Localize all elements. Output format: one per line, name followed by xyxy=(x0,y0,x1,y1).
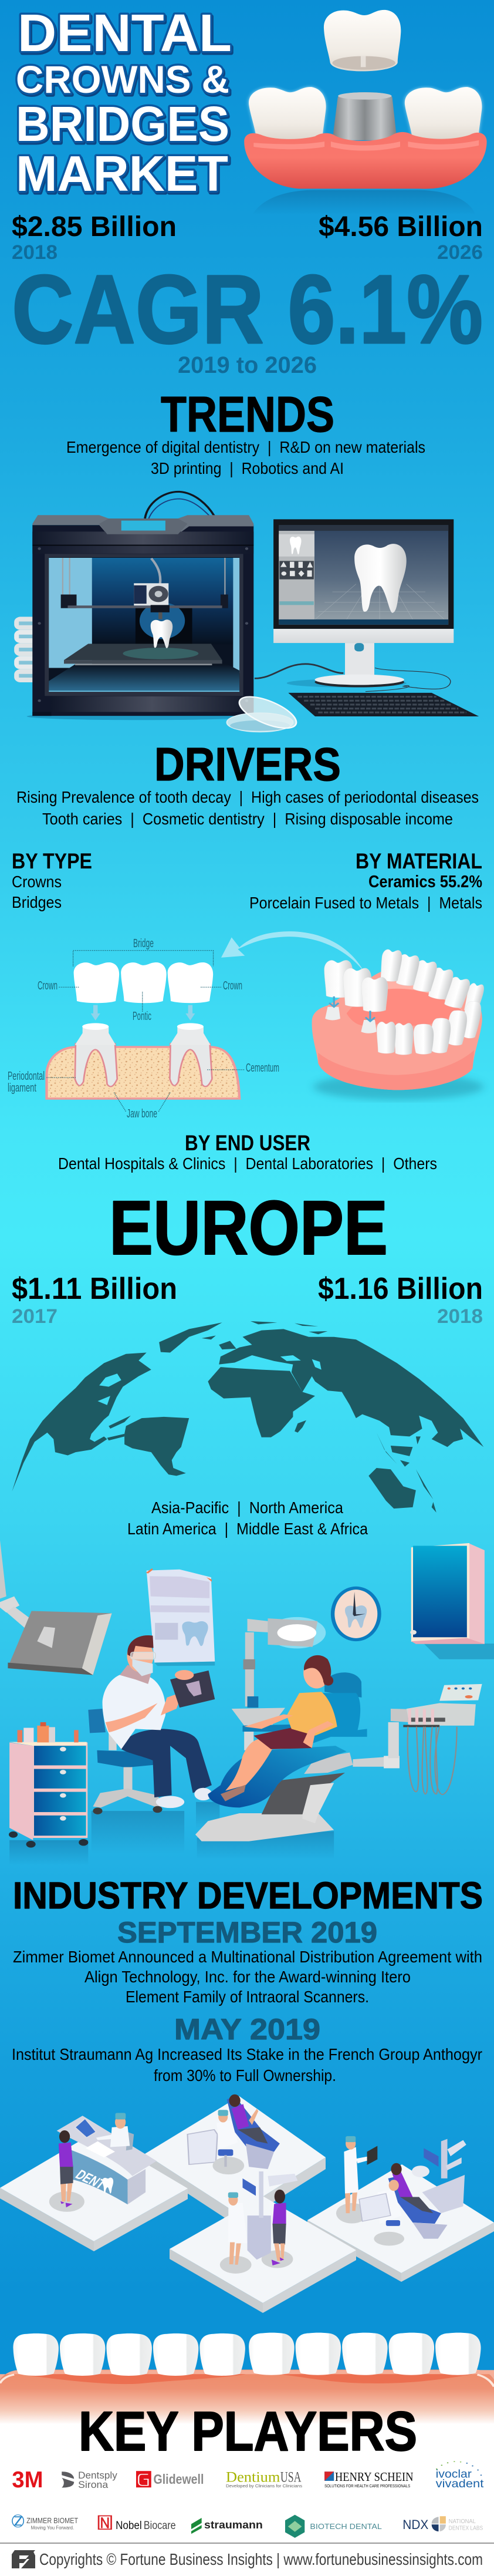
printed tooth xyxy=(151,619,172,648)
greenland xyxy=(159,1322,222,1353)
world map xyxy=(12,1321,483,1513)
x-ray viewer panel xyxy=(8,1611,112,1675)
gum xyxy=(244,132,487,189)
instrument unit xyxy=(388,1684,482,1794)
anatomy labels: Jaw bone xyxy=(127,1107,157,1120)
development text: zimmer biomet xyxy=(13,1948,482,2006)
segment: by material xyxy=(249,849,482,912)
logo: Nobel Biocare: Nobel xyxy=(116,2519,142,2532)
trends text: Emergence of digital dentistry | R&D on new materials xyxy=(66,438,425,456)
company logos: USA xyxy=(280,2469,302,2486)
drivers text xyxy=(16,788,479,828)
dental unit right xyxy=(359,2139,466,2246)
logo: Zimmer Biomet: Moving You Forward. xyxy=(31,2526,74,2531)
anatomy labels: Bridge xyxy=(133,937,154,950)
drawer cart xyxy=(9,1722,88,1847)
title: BRIDGES xyxy=(16,96,229,151)
resin disc stack xyxy=(14,617,58,682)
gum band xyxy=(0,2369,494,2424)
computer monitor xyxy=(273,519,454,688)
overhead arm xyxy=(0,1540,44,1638)
lamp and sink xyxy=(232,1617,326,1750)
segment: by type: Crowns xyxy=(12,873,62,891)
stat: 2026 market size: 2026 xyxy=(437,241,483,264)
small arrows xyxy=(329,996,375,1021)
floor reflections xyxy=(9,1802,334,1865)
logo: Dentsply Sirona: Dentsply xyxy=(78,2469,117,2481)
logo: Dentsply Sirona xyxy=(62,2469,117,2490)
printer body xyxy=(27,515,257,720)
eurasia xyxy=(219,1329,483,1447)
anatomy labels: Crown xyxy=(223,979,242,992)
heading: key players: KEY PLAYERS xyxy=(79,2400,417,2463)
logo: Henry Schein: SOLUTIONS FOR HEALTH CARE PROFESSIONALS xyxy=(324,2484,410,2489)
keyboard xyxy=(288,693,479,716)
logo: Ivoclar Vivadent: ivoclar xyxy=(436,2468,472,2480)
date: may 2019: MAY 2019 xyxy=(174,2013,320,2046)
stat: 2026 market size: $4.56 Billion xyxy=(319,211,483,243)
CAGR period: 2019 to 2026 xyxy=(178,352,317,378)
patient chair xyxy=(208,1672,367,1807)
platform: top centre xyxy=(145,2096,326,2225)
isometric clinic platforms xyxy=(0,2096,494,2313)
southeast asia islands xyxy=(377,1433,437,1513)
doctor and assistant bottom xyxy=(220,2171,297,2274)
hero illustration: crown, abutment and gum xyxy=(244,10,487,215)
stat: europe 2018: $1.16 Billion xyxy=(318,1272,483,1306)
logo: Henry Schein xyxy=(324,2470,414,2489)
row of teeth xyxy=(13,2333,481,2376)
dental chair base xyxy=(195,1753,400,1841)
reception desk xyxy=(57,2116,157,2204)
logo: Henry Schein: HENRY SCHEIN xyxy=(335,2470,414,2484)
africa xyxy=(208,1367,315,1437)
computer cables xyxy=(255,664,451,692)
metal abutment xyxy=(333,92,397,140)
logo: Straumann xyxy=(191,2518,263,2534)
australia xyxy=(368,1468,416,1508)
isometric clinic figures xyxy=(49,2095,466,2274)
right abutment tooth xyxy=(170,1023,212,1086)
printer cables xyxy=(145,491,214,518)
logo: Ivoclar Vivadent xyxy=(436,2461,483,2490)
logo: Glidewell: Glidewell xyxy=(154,2472,204,2487)
company logos xyxy=(12,2461,483,2538)
stat: europe 2017: $1.11 Billion xyxy=(12,1272,177,1306)
other regions text xyxy=(127,1499,368,1538)
white footer panel xyxy=(0,2424,494,2576)
anatomy labels: Cementum xyxy=(246,1062,279,1075)
logo: Straumann: straumann xyxy=(204,2519,263,2531)
anatomy labels xyxy=(8,937,279,1120)
illustration: 3D printer and computer xyxy=(14,491,479,735)
illustration: denture with bridge xyxy=(221,931,485,1100)
heading: drivers: DRIVERS xyxy=(154,738,341,790)
laptop xyxy=(75,2119,96,2138)
segment: by type: BY TYPE xyxy=(12,849,92,873)
print bed xyxy=(64,644,222,665)
title: CROWNS & xyxy=(16,58,229,101)
development text: straumann xyxy=(12,2045,482,2085)
receptionist xyxy=(96,2113,134,2150)
footer divider xyxy=(0,2543,494,2544)
right tooth xyxy=(405,87,482,140)
stat: 2018 market size: $2.85 Billion xyxy=(12,211,177,243)
implant stubs xyxy=(325,1007,377,1033)
bridge teeth xyxy=(74,962,213,1003)
anatomy labels: Crown xyxy=(38,979,57,992)
trends text xyxy=(66,438,425,477)
back teeth xyxy=(379,949,485,1013)
leader lines xyxy=(46,951,245,1112)
platform: right xyxy=(307,2164,494,2282)
segment: by end user xyxy=(58,1131,437,1173)
bridge piece xyxy=(324,960,388,1012)
petri dish xyxy=(227,691,302,735)
caribbean xyxy=(107,1416,131,1440)
standing doctor with tablet xyxy=(336,2136,377,2224)
anatomy labels: Periodontal xyxy=(8,1070,45,1083)
anatomy labels: ligament xyxy=(8,1082,36,1095)
date: september 2019: SEPTEMBER 2019 xyxy=(117,1916,377,1949)
logo: National Dentex Labs xyxy=(402,2516,483,2532)
logo: National Dentex Labs: NDX xyxy=(402,2518,428,2532)
logo: Zimmer Biomet: ZIMMER BIOMET xyxy=(26,2517,78,2525)
logo: Glidewell xyxy=(136,2471,204,2487)
wall poster xyxy=(146,1568,215,1666)
other regions text: Latin America | Middle East & Africa xyxy=(127,1520,368,1538)
stat: 2026 market size xyxy=(319,211,483,264)
stat: 2018 market size xyxy=(12,211,177,264)
stat: europe 2018 xyxy=(318,1272,483,1328)
printer window xyxy=(45,554,243,696)
illustration: dental clinic scene xyxy=(0,1540,494,1865)
curved arrow xyxy=(221,931,364,971)
stat: 2018 market size: 2018 xyxy=(12,241,57,264)
gantry and print head xyxy=(61,558,228,619)
title: MARKET xyxy=(16,146,228,202)
wall clock xyxy=(331,1587,381,1641)
british isles and arctic islands xyxy=(202,1321,327,1349)
drivers text: Tooth caries | Cosmetic dentistry | Rising disposable income xyxy=(42,810,453,828)
jaw bone xyxy=(46,1047,239,1099)
gum reflection xyxy=(252,190,476,215)
visitor at desk xyxy=(49,2130,84,2212)
denture shadow xyxy=(313,1074,483,1100)
placement arrows xyxy=(91,1005,195,1021)
logo: Dentium USA: Dentium xyxy=(226,2469,280,2486)
logo: Biotech Dental: BIOTECH DENTAL xyxy=(310,2522,382,2531)
treatment unit top xyxy=(188,2095,280,2174)
x-ray film xyxy=(170,1670,215,1708)
logo: Nobel Biocare: Biocare xyxy=(144,2519,176,2532)
segment: by type: Bridges xyxy=(12,893,62,911)
dentist on stool xyxy=(88,1635,212,1814)
stat: europe 2018: 2018 xyxy=(437,1305,483,1328)
south america xyxy=(124,1417,189,1476)
footer brand icon xyxy=(12,2550,35,2568)
logo: National Dentex Labs: NATIONAL xyxy=(449,2518,476,2524)
glow behind teeth xyxy=(249,87,482,137)
development text: zimmer biomet: Element Family of Intraoral Scanners. xyxy=(126,1988,369,2006)
logo: Dentium USA: Developed by Clinicians for Clinicians xyxy=(226,2484,302,2489)
front teeth xyxy=(377,1001,483,1055)
title xyxy=(16,4,232,202)
title: DENTAL xyxy=(18,4,232,63)
logo: Biotech Dental xyxy=(285,2515,382,2538)
anatomy labels: Pontic xyxy=(133,1010,151,1023)
segment: by end user: Dental Hospitals & Clinics | Dental Laboratories | Others xyxy=(58,1154,437,1173)
logo: Dentsply Sirona: Sirona xyxy=(78,2479,109,2490)
floating crown xyxy=(324,10,401,71)
madagascar xyxy=(295,1420,306,1433)
platform: reception xyxy=(0,2133,188,2251)
logo: Nobel Biocare xyxy=(99,2516,176,2532)
left abutment tooth xyxy=(75,1023,117,1086)
logo: Zimmer Biomet xyxy=(12,2515,78,2531)
development text: zimmer biomet: Align Technology, Inc. for the Award-winning Itero xyxy=(84,1968,411,1986)
development text: straumann: from 30% to Full Ownership. xyxy=(154,2066,336,2085)
trends text: 3D printing | Robotics and AI xyxy=(151,459,344,477)
other regions text: Asia-Pacific | North America xyxy=(151,1499,343,1517)
segment: by type xyxy=(12,849,92,911)
reception sign: DENT xyxy=(72,2167,110,2192)
segment: by end user: BY END USER xyxy=(185,1131,310,1155)
left tooth xyxy=(249,87,326,140)
gum base xyxy=(312,969,482,1090)
logo: 3M: 3M xyxy=(12,2467,43,2493)
heading: trends: TRENDS xyxy=(161,387,334,443)
wall cabinet xyxy=(410,1543,494,1659)
diagram: dental bridge anatomy xyxy=(46,951,245,1112)
platform: bottom centre xyxy=(170,2196,356,2313)
patient xyxy=(221,1655,337,1801)
heading: europe: EUROPE xyxy=(109,1184,388,1271)
stat: europe 2017: 2017 xyxy=(12,1305,57,1328)
north america xyxy=(12,1353,151,1491)
stat: europe 2017 xyxy=(12,1272,177,1328)
